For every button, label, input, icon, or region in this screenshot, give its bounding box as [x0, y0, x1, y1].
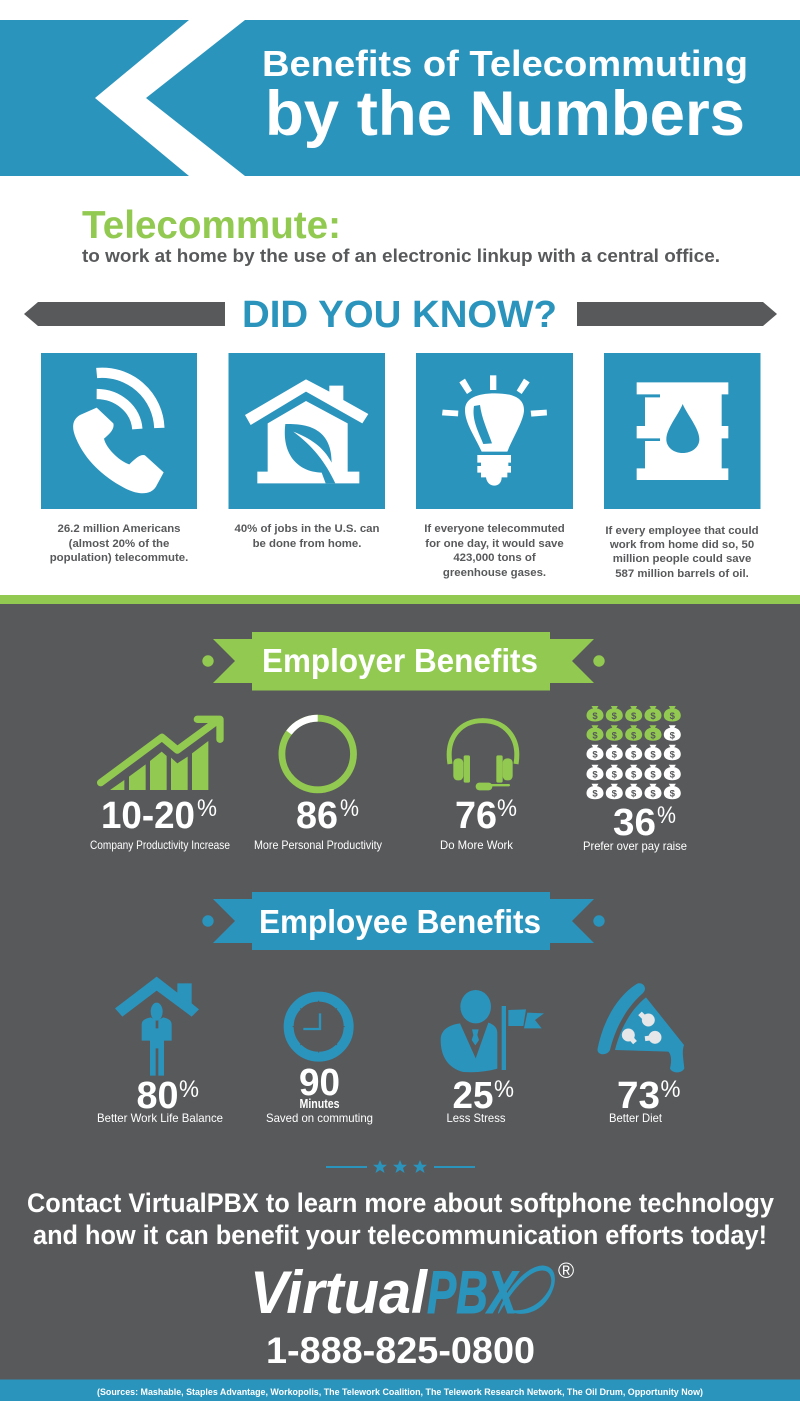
- ribbon: employee benefits heading: Employee Benefits: [259, 903, 541, 940]
- panel: greenhouse gas fact: [416, 353, 573, 579]
- panel: greenhouse gas fact: If everyone telecommuted: [424, 523, 565, 535]
- stat: work life balance: %: [179, 1076, 199, 1103]
- icon: money bags 5 by 5 grid: $: [650, 711, 656, 722]
- title: [262, 43, 748, 149]
- icon: money bags 5 by 5 grid: $: [631, 750, 637, 761]
- stat: company productivity: [90, 719, 230, 852]
- icon: house with leaf: [245, 379, 368, 483]
- stat: do more work: %: [497, 795, 517, 822]
- panel: oil barrel fact: If every employee that could: [605, 525, 759, 537]
- icon: money bags 5 by 5 grid: $: [592, 770, 598, 781]
- stat: minutes saved: 90: [299, 1062, 340, 1104]
- icon: phone: [73, 373, 164, 493]
- stat: less stress: [441, 990, 544, 1125]
- definition block: [82, 204, 720, 266]
- stat: minutes saved: [266, 997, 373, 1125]
- title: Benefits of Telecommuting: [262, 43, 748, 84]
- icon: money bags 5 by 5 grid: $: [612, 750, 618, 761]
- stat: work life balance: 80: [136, 1075, 178, 1117]
- icon: money bags 5 by 5 grid: $: [631, 789, 637, 800]
- stat: do more work: [440, 721, 517, 852]
- panel: dark benefits background: [0, 604, 800, 1380]
- stat: prefer over pay raise: %: [657, 802, 676, 829]
- stat: do more work: Do More Work: [440, 838, 514, 852]
- stat: better diet: [597, 983, 684, 1125]
- stat: personal productivity: 86: [296, 795, 338, 837]
- icon: white chevron: [95, 20, 245, 176]
- did you know heading: DID YOU KNOW?: [242, 294, 557, 336]
- icon: money bags 5 by 5 grid: $: [650, 770, 656, 781]
- icon: money bags 5 by 5 grid: $: [650, 789, 656, 800]
- panel: oil barrel fact: 587 million barrels of oil.: [615, 568, 749, 580]
- stat: do more work: 76: [455, 795, 497, 837]
- stat: less stress: 25: [452, 1075, 494, 1117]
- icon: money bags 5 by 5 grid: $: [592, 789, 598, 800]
- header banner: [0, 20, 800, 176]
- ribbon: employer benefits heading: [202, 632, 605, 690]
- stat: minutes saved: Minutes: [300, 1097, 340, 1111]
- icon: light bulb: [442, 375, 547, 486]
- icon: money bags 5 by 5 grid: $: [670, 770, 676, 781]
- panel: phone fact: population) telecommute.: [50, 552, 188, 564]
- stat: better diet: %: [660, 1076, 680, 1103]
- stat: company productivity: 10-20: [101, 795, 195, 837]
- stat: better diet: Better Diet: [609, 1111, 663, 1125]
- phone number: 1-888-825-0800: [266, 1330, 535, 1371]
- definition block: Telecommute:: [82, 204, 341, 247]
- call to action text: [27, 1188, 774, 1250]
- icon: money bags 5 by 5 grid: $: [592, 730, 598, 741]
- icon: money bags 5 by 5 grid: $: [612, 770, 618, 781]
- stat: less stress: %: [494, 1076, 514, 1103]
- call to action text: Contact VirtualPBX to learn more about softphone technology: [27, 1188, 774, 1218]
- panel: home jobs fact: be done from home.: [253, 538, 361, 550]
- logo: VirtualPBX: PBX: [427, 1259, 520, 1326]
- icon: rising bar chart: [101, 719, 220, 790]
- did you know heading: [24, 294, 777, 336]
- panel: home jobs fact: 40% of jobs in the U.S. can: [235, 523, 380, 535]
- icon: money bags 5 by 5 grid: $: [592, 711, 598, 722]
- stat: company productivity: %: [197, 795, 217, 822]
- icon: money bags 5 by 5 grid: $: [650, 750, 656, 761]
- panel: phone fact: (almost 20% of the: [69, 538, 169, 550]
- stat: work life balance: [97, 977, 223, 1125]
- icon: businessman with flag: [441, 990, 544, 1072]
- icon: clock: [289, 997, 349, 1057]
- ribbon: employer benefits heading: Employer Benefits: [262, 642, 538, 679]
- icon: money bags 5 by 5 grid: $: [612, 730, 618, 741]
- icon: logo swoosh: [498, 1266, 554, 1313]
- icon: money bags 5 by 5 grid: $: [670, 789, 676, 800]
- icon: money bags 5 by 5 grid: $: [631, 770, 637, 781]
- panel: oil barrel fact: million people could save: [613, 553, 751, 565]
- definition block: to work at home by the use of an electronic linkup with a central office.: [82, 245, 720, 266]
- icon: money bags 5 by 5 grid: $: [631, 730, 637, 741]
- icon: donut chart 86 percent: [282, 718, 354, 790]
- stat: prefer over pay raise: 36: [613, 802, 656, 844]
- stat: personal productivity: %: [340, 795, 359, 822]
- panel: home jobs fact: [228, 353, 385, 550]
- logo: VirtualPBX: ®: [558, 1258, 574, 1283]
- icon: headset: [449, 721, 517, 790]
- star divider: [326, 1160, 475, 1173]
- icon: person under roof: [115, 977, 199, 1076]
- panel: phone fact: [41, 353, 197, 564]
- icon: money bags 5 by 5 grid: $: [612, 711, 618, 722]
- ribbon: employee benefits heading: [202, 892, 605, 950]
- call to action text: and how it can benefit your telecommunication efforts today!: [33, 1220, 767, 1250]
- green divider band: [0, 595, 800, 604]
- footer sources bar: [0, 1380, 800, 1401]
- icon: money bags 5 by 5 grid: $: [592, 750, 598, 761]
- stat: better diet: 73: [617, 1075, 660, 1117]
- icon: money bags 5 by 5 grid: $: [631, 711, 637, 722]
- title: by the Numbers: [265, 79, 745, 149]
- panel: greenhouse gas fact: greenhouse gases.: [443, 567, 546, 579]
- stat: prefer over pay raise: [583, 706, 687, 853]
- panel: phone fact: 26.2 million Americans: [57, 523, 181, 535]
- stat: prefer over pay raise: Prefer over pay raise: [583, 839, 687, 853]
- icon: oil barrel: [637, 382, 728, 480]
- panel: oil barrel fact: work from home did so, 50: [609, 539, 754, 551]
- panel: greenhouse gas fact: for one day, it would save: [425, 538, 564, 550]
- stat: personal productivity: More Personal Productivity: [254, 838, 382, 852]
- footer sources bar: (Sources: Mashable, Staples Advantage, Workopolis, The Telework Coalition, The Telework Research Network, The Oil Drum, Opportunity Now): [97, 1387, 703, 1398]
- icon: money bags 5 by 5 grid: [586, 706, 681, 800]
- icon: money bags 5 by 5 grid: $: [670, 730, 676, 741]
- stat: less stress: Less Stress: [446, 1111, 506, 1125]
- logo: VirtualPBX: Virtual: [250, 1259, 428, 1326]
- stat: work life balance: Better Work Life Balance: [97, 1111, 223, 1125]
- icon: money bags 5 by 5 grid: $: [650, 730, 656, 741]
- panel: oil barrel fact: [604, 353, 760, 580]
- stat: company productivity: Company Productivity Increase: [90, 838, 230, 852]
- stat: personal productivity: [254, 718, 382, 852]
- icon: money bags 5 by 5 grid: $: [612, 789, 618, 800]
- panel: greenhouse gas fact: 423,000 tons of: [453, 552, 536, 564]
- stat: minutes saved: Saved on commuting: [266, 1111, 373, 1125]
- icon: pizza slice: [597, 983, 684, 1072]
- icon: money bags 5 by 5 grid: $: [670, 750, 676, 761]
- logo: VirtualPBX: [250, 1258, 574, 1326]
- icon: money bags 5 by 5 grid: $: [670, 711, 676, 722]
